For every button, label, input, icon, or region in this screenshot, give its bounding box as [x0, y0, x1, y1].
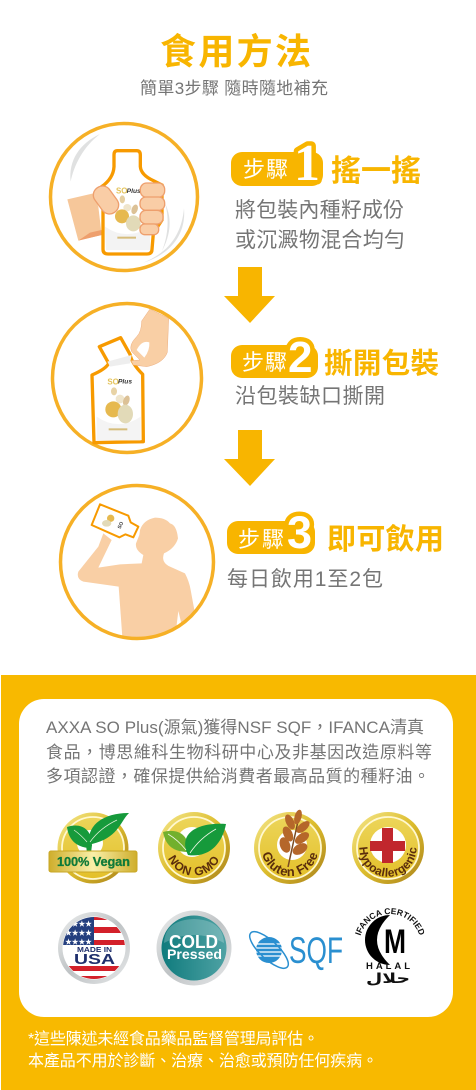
step 1 illustration: shaking pouch	[50, 124, 198, 270]
logo: IFANCA halal: M	[384, 923, 406, 961]
step 2 illustration: tearing pouch: Plus	[118, 379, 132, 386]
badge: cold pressed	[156, 910, 232, 986]
fingers	[140, 183, 165, 235]
step 1 heading: 搖一搖	[331, 155, 421, 188]
step 3 label	[227, 507, 315, 558]
disclaimer: 本產品不用於診斷、治療、治愈或預防任何疾病。	[28, 1052, 378, 1070]
pouch	[92, 338, 143, 443]
step 1 illustration: shaking pouch: SO	[116, 186, 128, 195]
disclaimer	[28, 1029, 378, 1070]
step 3 label: 步驟	[238, 527, 284, 552]
badge: non GMO	[158, 812, 230, 884]
badge: 100% vegan: 100% Vegan	[57, 854, 130, 869]
person	[78, 518, 198, 642]
logo: IFANCA halal: HALAL	[366, 961, 410, 972]
badge: gluten free	[254, 810, 326, 884]
certification text	[46, 718, 432, 786]
step 3 label: 3	[287, 507, 312, 558]
step 1 description: 將包裝內種籽成份	[235, 199, 404, 222]
logo: SQF: SQF	[289, 930, 343, 971]
subtitle: 簡單3步驟 隨時隨地補充	[140, 78, 328, 98]
step 2 label	[231, 333, 318, 382]
badge: gluten free: Gluten Free	[263, 852, 318, 876]
logo: IFANCA halal: IFANCA CERTIFIED	[355, 908, 424, 936]
arrow 1	[224, 267, 275, 323]
certification text: 食品，博思維科生物科研中心及非基因改造原料等	[46, 743, 432, 762]
badge: made in USA	[58, 912, 130, 984]
step 3 illustration: drinking: SO	[117, 521, 125, 530]
badge: non GMO: NON GMO	[168, 854, 218, 876]
step 1 label	[231, 135, 323, 192]
bottle	[92, 504, 138, 537]
step 2 label: 2	[288, 333, 312, 382]
step 3 illustration: drinking	[60, 486, 214, 642]
step 1 illustration: shaking pouch: Plus	[127, 188, 141, 195]
step 2 illustration: tearing pouch	[52, 304, 202, 452]
step 1 description: 或沉澱物混合均勻	[235, 229, 405, 252]
thumb	[90, 183, 122, 217]
disclaimer: *這些陳述未經食品藥品監督管理局評估。	[28, 1029, 319, 1048]
step 3 heading: 即可飲用	[327, 523, 444, 556]
logo: IFANCA halal: حلال	[366, 971, 410, 987]
motion lines	[70, 134, 184, 263]
arrow 2	[224, 430, 275, 486]
pouch	[102, 151, 162, 254]
step 1 description	[235, 199, 405, 252]
step 2 heading: 撕開包裝	[324, 348, 439, 380]
badge: made in USA: ★★★★	[65, 929, 92, 937]
badge: cold pressed: COLD	[169, 932, 218, 952]
step 1 label: 1	[294, 135, 320, 192]
step 2 label: 步驟	[242, 350, 287, 375]
title: 食用方法	[160, 31, 311, 72]
white card	[19, 699, 453, 1017]
badge: made in USA: ★★★★	[65, 938, 92, 946]
badge: made in USA: USA	[74, 951, 115, 968]
arm	[67, 193, 102, 241]
logo: IFANCA halal	[355, 908, 424, 987]
certification text: AXXA SO Plus(源氣)獲得NSF SQF，IFANCA清真	[46, 718, 424, 737]
badge: made in USA: MADE IN	[77, 945, 112, 954]
badge: made in USA: ★★★★	[65, 920, 92, 928]
step 2 description: 沿包裝缺口撕開	[235, 385, 385, 408]
hand	[131, 309, 169, 367]
panel: certifications	[1, 675, 476, 1090]
badge: cold pressed: Pressed	[167, 946, 222, 962]
certification text: 多項認證，確保提供給消費者最高品質的種籽油。	[46, 767, 430, 786]
step 3 description: 每日飲用1至2包	[227, 568, 383, 591]
step 1 label: 步驟	[243, 157, 288, 182]
badge: hypoallergenic	[352, 812, 424, 884]
badge: hypoallergenic: Hypoallergenic	[358, 847, 416, 877]
logo: SQF	[245, 926, 343, 974]
step 2 illustration: tearing pouch: SO	[107, 377, 119, 386]
badge: 100% vegan	[49, 812, 137, 884]
